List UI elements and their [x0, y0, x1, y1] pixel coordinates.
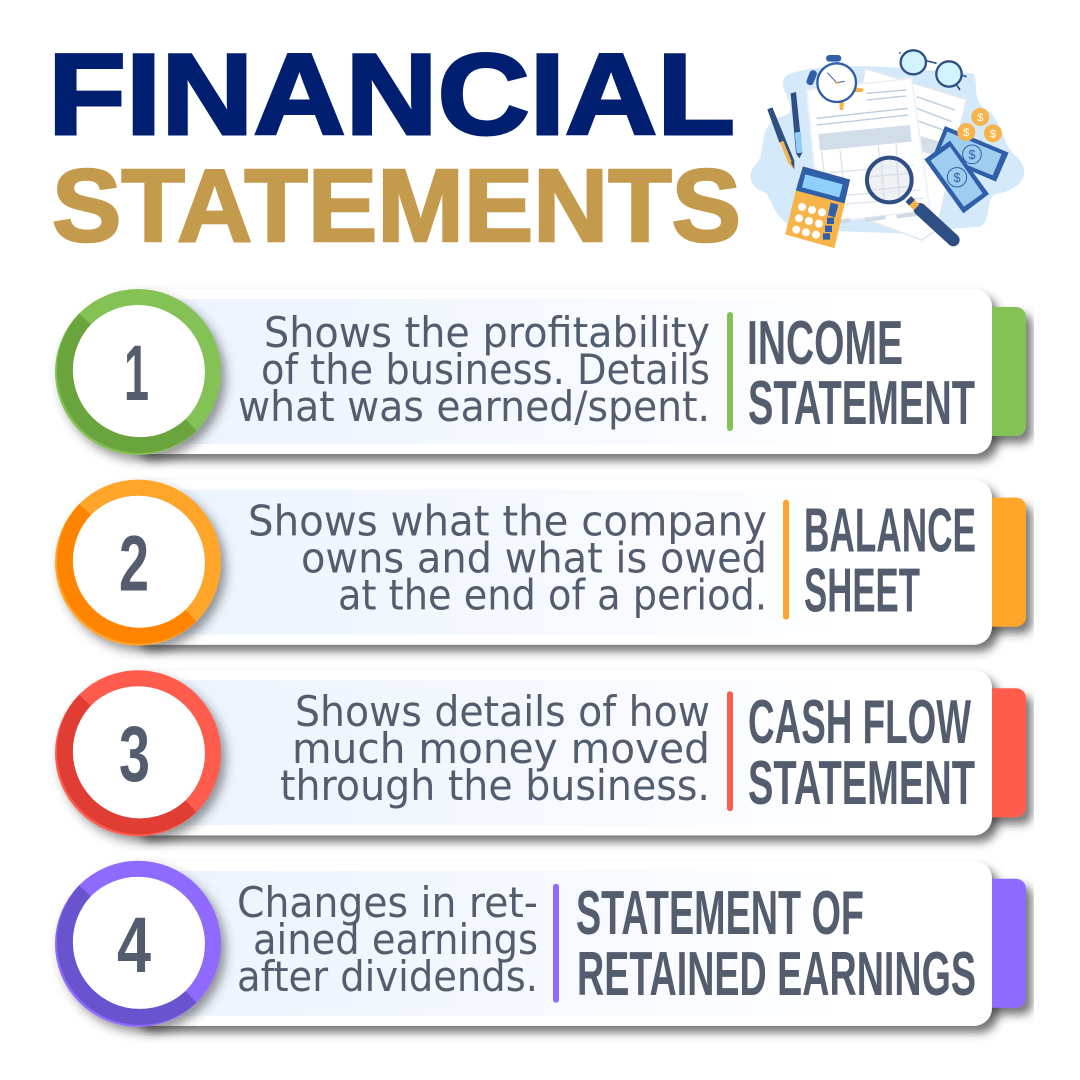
card shadow: [130, 480, 992, 645]
tab: [950, 307, 1026, 436]
icon: coins: [957, 108, 1002, 142]
description: Shows what the company: [248, 497, 767, 546]
icon: calculator: [786, 167, 849, 247]
description: through the business.: [280, 761, 710, 810]
number ring: [63, 488, 213, 638]
description: Changes in ret-: [237, 878, 538, 927]
heading: [748, 688, 975, 818]
icon: pen: [791, 92, 802, 158]
description: [248, 497, 767, 620]
divider: [783, 500, 789, 620]
title: STATEMENTS: [52, 148, 741, 263]
description: at the end of a period.: [338, 571, 767, 620]
panel: balance sheet: [63, 480, 1026, 645]
heading: STATEMENT OF: [576, 879, 864, 948]
icon: coins: $: [990, 128, 997, 140]
icon: alarm clock: [805, 55, 864, 110]
heading: SHEET: [804, 557, 920, 626]
icon: coins: $: [963, 127, 970, 139]
description: Shows details of how: [295, 687, 710, 736]
icon: banknotes: $: [968, 148, 976, 162]
description: [238, 308, 710, 431]
description: [280, 687, 710, 810]
number ring: [63, 869, 213, 1019]
heading: INCOME: [747, 309, 903, 378]
tab: [950, 879, 1026, 1008]
description: owns and what is owed: [301, 534, 767, 583]
description: [237, 878, 538, 1001]
description: ained earnings: [253, 915, 538, 964]
divider: [727, 312, 733, 431]
number: 3: [119, 709, 150, 798]
icon: magnifying glass: [867, 158, 953, 240]
card: [130, 289, 992, 454]
number: 1: [124, 328, 149, 417]
icon: front sheet: [807, 78, 930, 223]
card: [130, 480, 992, 645]
number ring: [63, 297, 213, 447]
card shadow: [130, 670, 992, 835]
panel: statement of retained earnings: [63, 861, 1026, 1026]
illustration: financial paperwork: [750, 50, 1024, 247]
icon: coins: $: [977, 112, 984, 124]
card shadow: [130, 861, 992, 1026]
description: what was earned/spent.: [238, 382, 710, 431]
number ring: [63, 678, 213, 828]
number: 2: [119, 519, 149, 608]
description: after dividends.: [237, 952, 538, 1001]
panel: income statement: [63, 289, 1026, 454]
icon: banknotes: $: [953, 171, 961, 185]
heading: [804, 497, 976, 626]
icon: glasses: [899, 50, 967, 90]
description: of the business. Details: [261, 345, 710, 394]
panel: cash flow statement: [63, 670, 1026, 835]
divider: [553, 884, 559, 1003]
heading: [576, 879, 976, 1009]
heading: [747, 309, 975, 438]
description: much money moved: [292, 724, 710, 773]
divider: [727, 691, 733, 811]
icon: pencil: [767, 107, 794, 169]
title: FINANCIAL: [48, 31, 735, 159]
tab: [950, 688, 1026, 817]
tab: [950, 498, 1026, 627]
icon: back sheet: [840, 68, 967, 240]
description: Shows the profitability: [264, 308, 710, 357]
card shadow: [130, 289, 992, 454]
card: [130, 861, 992, 1026]
icon: banknotes: [924, 126, 1009, 213]
card: [130, 670, 992, 835]
title: [48, 31, 741, 263]
number: 4: [117, 900, 151, 989]
